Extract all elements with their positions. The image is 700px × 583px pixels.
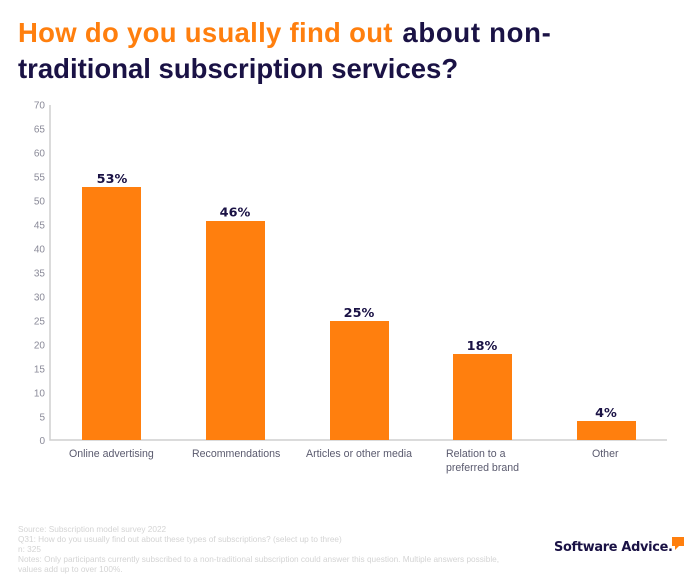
title: traditional subscription services? <box>18 53 458 84</box>
y axis labels: 55 <box>34 172 45 184</box>
y axis labels <box>34 100 45 447</box>
y axis labels: 10 <box>34 388 45 400</box>
footnotes: Q31: How do you usually find out about these types of subscriptions? (select up to three) <box>18 535 342 544</box>
y axis labels: 30 <box>34 292 45 304</box>
category labels: preferred brand <box>446 462 519 474</box>
y axis labels: 60 <box>34 148 45 160</box>
category labels: Recommendations <box>192 448 280 460</box>
axes <box>50 105 667 440</box>
value labels: 46% <box>220 206 250 220</box>
category labels: Relation to a <box>446 448 506 460</box>
bars <box>82 187 636 440</box>
y axis labels: 45 <box>34 220 45 232</box>
y axis labels: 50 <box>34 196 45 208</box>
icon: speech bubble <box>672 537 684 550</box>
title: How do you usually find out about non- <box>18 17 551 48</box>
category labels: Articles or other media <box>306 448 412 460</box>
footnotes: n: 325 <box>18 545 41 554</box>
category labels: Other <box>592 448 619 460</box>
y axis labels: 35 <box>34 268 45 280</box>
y axis labels: 5 <box>39 412 45 424</box>
category labels <box>69 448 619 474</box>
y axis labels: 40 <box>34 244 45 256</box>
value labels: 53% <box>97 172 127 187</box>
y axis labels: 0 <box>39 436 45 447</box>
category labels: Online advertising <box>69 448 154 460</box>
logo: Software Advice. <box>554 540 673 555</box>
footnotes: Notes: Only participants currently subscribed to a non-traditional subscription could answer this question. Multiple answers possible, <box>18 555 499 564</box>
footnotes: Source: Subscription model survey 2022 <box>18 525 166 534</box>
value labels: 4% <box>595 406 617 421</box>
footnotes: values add up to over 100%. <box>18 565 123 574</box>
y axis labels: 20 <box>34 340 45 352</box>
value labels <box>97 172 617 421</box>
y axis labels: 25 <box>34 316 45 328</box>
value labels: 25% <box>344 306 374 321</box>
y axis labels: 65 <box>34 124 45 136</box>
y axis labels: 70 <box>34 100 45 112</box>
title <box>18 17 551 84</box>
footnotes <box>18 525 499 574</box>
value labels: 18% <box>467 339 497 354</box>
y axis labels: 15 <box>34 364 45 376</box>
